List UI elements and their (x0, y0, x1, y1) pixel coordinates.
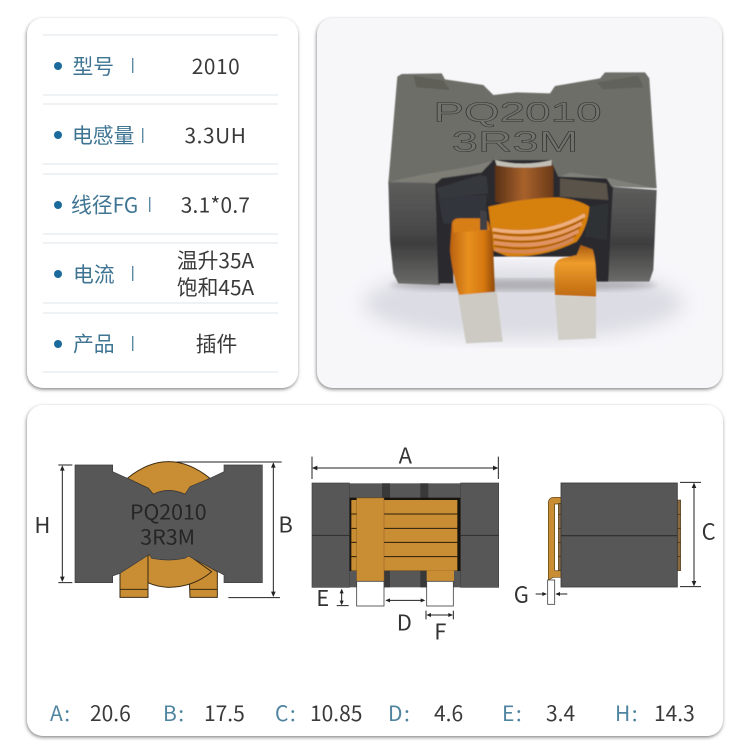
dimension values: 3.4 (546, 698, 575, 728)
drawing: side view (514, 482, 716, 610)
row: product type (54, 328, 237, 358)
dimension F: F (434, 614, 446, 646)
drawing: top view (34, 462, 293, 598)
dimension A (312, 439, 498, 479)
row: inductance: 3.3UH (184, 119, 247, 149)
row: inductance: 电感量 (72, 119, 134, 149)
dimension G (514, 578, 567, 610)
dimension F (426, 611, 453, 646)
row: current (54, 244, 255, 301)
chip marking (130, 495, 207, 551)
drawing: front view (312, 439, 499, 646)
chip marking: 3R3M (140, 521, 195, 551)
top face (388, 72, 657, 188)
dimension B (177, 462, 293, 598)
row: product type: 插件 (196, 328, 237, 358)
dimension C: C (702, 514, 716, 546)
row: wire gauge: 3.1*0.7 (181, 188, 250, 218)
dimension E (316, 581, 349, 613)
tinned pins (458, 292, 503, 343)
row: model: 型号 (72, 50, 114, 80)
photo: inductor component (363, 72, 683, 343)
panel: dimension drawings (27, 405, 723, 736)
dimension H (34, 465, 72, 583)
engraved marking: 3R3M (452, 127, 578, 159)
dimension values: 14.3 (654, 698, 695, 728)
cavity shadows (435, 157, 613, 283)
dimension values: H: (615, 698, 639, 728)
row: product type: 产品 (73, 328, 115, 358)
dimension values: 10.85 (310, 698, 362, 728)
dimension B: B (278, 507, 293, 539)
core body front blocks (388, 182, 440, 285)
dimension values: 17.5 (204, 698, 245, 728)
dimension values: A: (50, 698, 72, 728)
dimension values: C: (275, 698, 297, 728)
dimension values: 4.6 (434, 698, 463, 728)
panel: specification table (27, 18, 298, 388)
dimension H: H (34, 508, 50, 540)
dimension values: D: (388, 698, 411, 728)
row: wire gauge: 线径FG (71, 188, 138, 218)
winding (488, 197, 589, 256)
row: current: 温升35A (177, 244, 255, 274)
core post (495, 165, 553, 205)
dimension D (385, 598, 425, 637)
panel: product photo (317, 18, 722, 388)
row: current: 饱和45A (177, 271, 255, 301)
dimension values (50, 698, 695, 728)
row: current: 电流 (73, 258, 115, 288)
left lead (450, 218, 495, 296)
dimension A: A (399, 439, 413, 471)
dimension G: G (514, 578, 529, 610)
dimension D: D (397, 605, 412, 637)
dimension values: E: (502, 698, 523, 728)
engraved marking: PQ2010 (433, 97, 602, 128)
right lead (554, 245, 596, 297)
dimension C (680, 482, 716, 587)
row: wire gauge (54, 188, 250, 218)
engraved marking (433, 97, 602, 159)
dimension values: B: (163, 698, 186, 728)
chip marking: PQ2010 (130, 495, 207, 525)
row: model: 2010 (192, 50, 240, 80)
dimension values: 20.6 (90, 698, 131, 728)
row: inductance (54, 119, 247, 149)
dimension E: E (316, 581, 329, 613)
row: model (54, 50, 240, 80)
